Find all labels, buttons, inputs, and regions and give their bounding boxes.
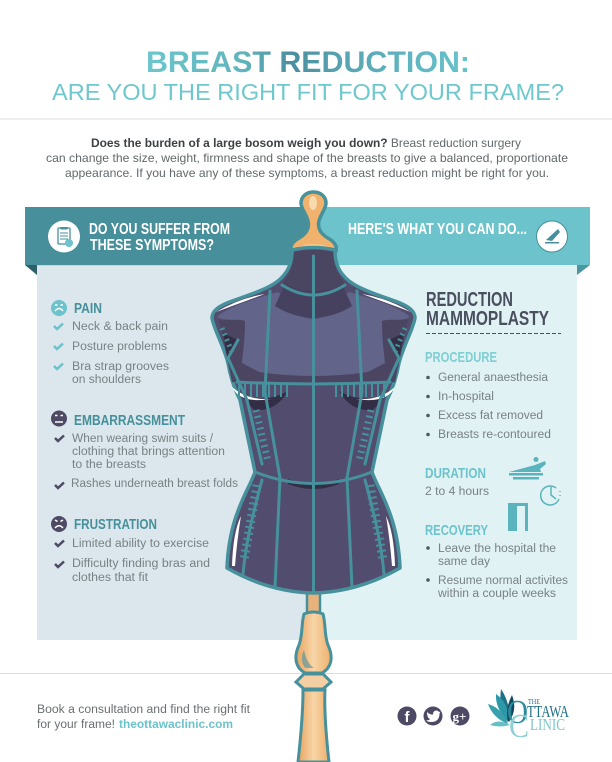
title [52,46,564,105]
footer text: Book a consultation and find the right fit [37,704,251,716]
icon: clock [541,486,560,505]
seam lines [228,256,399,592]
logo leaves [488,689,514,726]
logo: the ottawa clinic: THE [528,698,540,706]
icon: facebook [398,706,416,726]
intro text [46,136,568,180]
section: procedure: In-hospital [438,391,494,403]
section: procedure: Breasts re-contoured [438,429,551,441]
icon: google plus [450,706,470,726]
seam hatching [222,328,405,560]
icon: clipboard [48,220,80,252]
section: frustration: Difficulty finding bras and [72,558,210,570]
intro text: Does the burden of a large bosom weigh you down? Breast reduction surgery [91,136,521,150]
section: embarrassment: When wearing swim suits / [72,433,214,445]
section: pain: Neck & back pain [72,321,168,333]
intro text: can change the size, weight, firmness and shape of the breasts to give a balanced, proportionate [46,151,568,165]
banner: what you can do: HERE'S WHAT YOU CAN DO... [348,221,527,238]
icon: door [508,503,528,531]
underbust medium band [219,320,408,385]
icon: angry face [51,516,67,532]
neck yoke shadow [275,284,352,319]
illustration: dress form mannequin [212,192,415,762]
section: procedure: Excess fat removed [438,410,543,422]
footer text: theottawaclinic.com [119,719,233,731]
section: embarrassment: to the breasts [72,459,146,471]
section: pain: Posture problems [72,341,167,353]
intro text: appearance. If you have any of these symptoms, a breast reduction might be right for you. [65,166,549,180]
section: embarrassment: EMBARRASSMENT [74,412,185,429]
section: procedure [425,349,551,441]
upper neck shade [282,250,345,292]
section: frustration: clothes that fit [72,572,149,584]
logo: the ottawa clinic: C [509,708,529,745]
section: frustration [51,516,210,584]
section: recovery: within a couple weeks [437,588,556,600]
section: pain: on shoulders [72,374,141,386]
icon: surgery bed [509,457,546,480]
section: procedure: General anaesthesia [438,372,549,384]
heading: reduction mammoplasty: REDUCTION [426,289,513,311]
chest highlight panel [217,292,410,376]
banner: symptoms: THESE SYMPTOMS? [90,237,214,254]
section: pain [51,300,169,386]
logo: the ottawa clinic [488,689,570,745]
icon: pencil [536,221,568,252]
wooden finial [291,192,336,251]
section: embarrassment: Rashes underneath breast folds [71,478,238,490]
section: duration: 2 to 4 hours [425,486,489,498]
panel: symptoms background [37,265,313,640]
bust crescents [216,294,411,566]
section: duration: DURATION [425,465,486,482]
section: pain: PAIN [74,300,102,317]
icon: neutral face [51,410,67,426]
section: recovery: Leave the hospital the [438,543,556,555]
title: ARE YOU THE RIGHT FIT FOR YOUR FRAME? [52,79,564,105]
bust shadows [223,333,404,489]
footer text: for your frame! [37,719,115,731]
section: recovery: Resume normal activites [438,575,568,587]
wooden stand [296,591,331,762]
section: procedure: PROCEDURE [425,349,497,366]
logo: the ottawa clinic: TTAWA [527,702,570,721]
logo: the ottawa clinic: O [507,694,528,731]
banner: symptoms: DO YOU SUFFER FROM [89,221,230,238]
heading: reduction mammoplasty [426,289,561,334]
torso body [212,248,415,593]
banner: symptoms [25,207,313,275]
footer text [37,704,251,731]
banner: what you can do [313,207,590,275]
panel: treatment background [313,265,577,640]
section: pain: Bra strap grooves [72,361,169,373]
heading: reduction mammoplasty: MAMMOPLASTY [426,308,550,330]
section: recovery: RECOVERY [425,522,488,539]
section: embarrassment: clothing that brings attention [72,446,225,458]
title: BREAST REDUCTION: [146,46,470,79]
logo: the ottawa clinic: LINIC [530,715,565,734]
section: frustration: FRUSTRATION [74,516,157,533]
footer divider [0,673,612,674]
section: recovery: same day [438,556,490,568]
section: recovery [425,522,568,600]
icon: twitter [424,706,442,726]
section: duration [425,465,489,498]
section: embarrassment [51,410,238,490]
icon: google plus: g+ [453,709,466,724]
icon: facebook: f [404,709,410,726]
icon: sad face teal [51,300,67,316]
section: frustration: Limited ability to exercise [72,538,209,550]
